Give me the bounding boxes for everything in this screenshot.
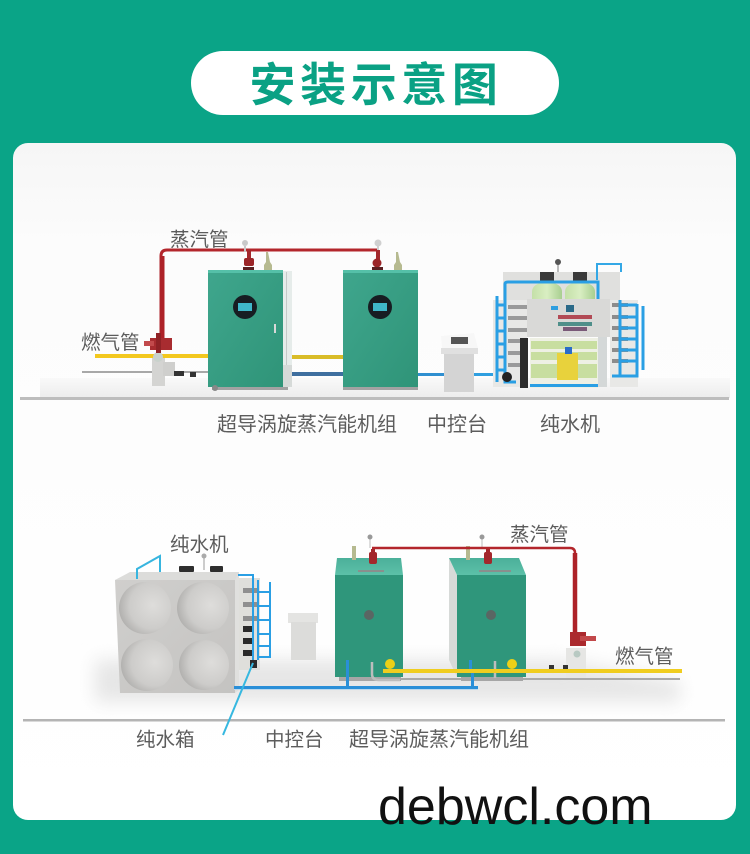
bottom diagram xyxy=(23,524,725,751)
floor line bottom xyxy=(23,719,725,722)
control panel xyxy=(527,299,610,337)
water link pipes xyxy=(290,372,495,376)
yellow gas pipe xyxy=(383,659,682,673)
label: control desk: 中控台 xyxy=(265,729,324,751)
left membranes xyxy=(497,296,516,382)
steam pipe xyxy=(161,250,378,345)
gas valve station xyxy=(144,333,196,386)
label: pure water machine: 纯水机 xyxy=(170,534,229,556)
filter tanks xyxy=(532,259,595,300)
gas pipe xyxy=(82,354,345,373)
control desk top xyxy=(441,333,478,392)
pure water machine top xyxy=(493,259,643,388)
floor line top xyxy=(20,397,729,400)
gas valve station bottom xyxy=(549,632,596,678)
floor bottom xyxy=(95,660,680,702)
boiler unit 2 xyxy=(343,240,418,390)
main white panel xyxy=(13,143,736,820)
label: gas pipe: 燃气管 xyxy=(615,646,674,668)
boiler unit B xyxy=(449,534,526,681)
control display xyxy=(368,295,392,319)
website watermark: debwcl.com xyxy=(378,778,653,836)
label: boiler unit: 超导涡旋蒸汽能机组 xyxy=(349,728,529,751)
label: gas pipe: 燃气管 xyxy=(81,332,140,354)
valves xyxy=(466,534,492,564)
valves xyxy=(352,534,377,564)
label: boiler unit: 超导涡旋蒸汽能机组 xyxy=(217,413,397,436)
stainless water tank xyxy=(115,554,239,693)
floor top xyxy=(40,378,730,398)
valves xyxy=(242,240,272,270)
valves xyxy=(372,240,402,270)
grey return elbows xyxy=(372,661,495,680)
compact water machine xyxy=(238,575,270,670)
boiler unit A xyxy=(335,534,403,681)
control desk bottom xyxy=(288,613,318,660)
lower tanks frame xyxy=(520,337,607,388)
right membranes xyxy=(612,303,628,363)
label: control desk: 中控台 xyxy=(427,413,487,436)
label: steam pipe: 蒸汽管 xyxy=(170,229,229,251)
title: 安装示意图 xyxy=(250,59,502,111)
tank domes xyxy=(119,582,229,691)
pump xyxy=(502,372,512,382)
top diagram xyxy=(20,229,730,436)
title pill xyxy=(191,51,559,115)
side frames xyxy=(493,300,527,387)
dosing tank xyxy=(557,347,578,380)
steam pipe bottom xyxy=(372,548,575,632)
pipes on floor xyxy=(223,660,478,735)
return pipe xyxy=(380,678,680,680)
label: pure water machine: 纯水机 xyxy=(540,413,600,436)
label: water tank: 纯水箱 xyxy=(136,729,195,751)
label: steam pipe: 蒸汽管 xyxy=(510,524,569,546)
control display xyxy=(233,295,257,319)
boiler unit 1 xyxy=(208,240,292,391)
